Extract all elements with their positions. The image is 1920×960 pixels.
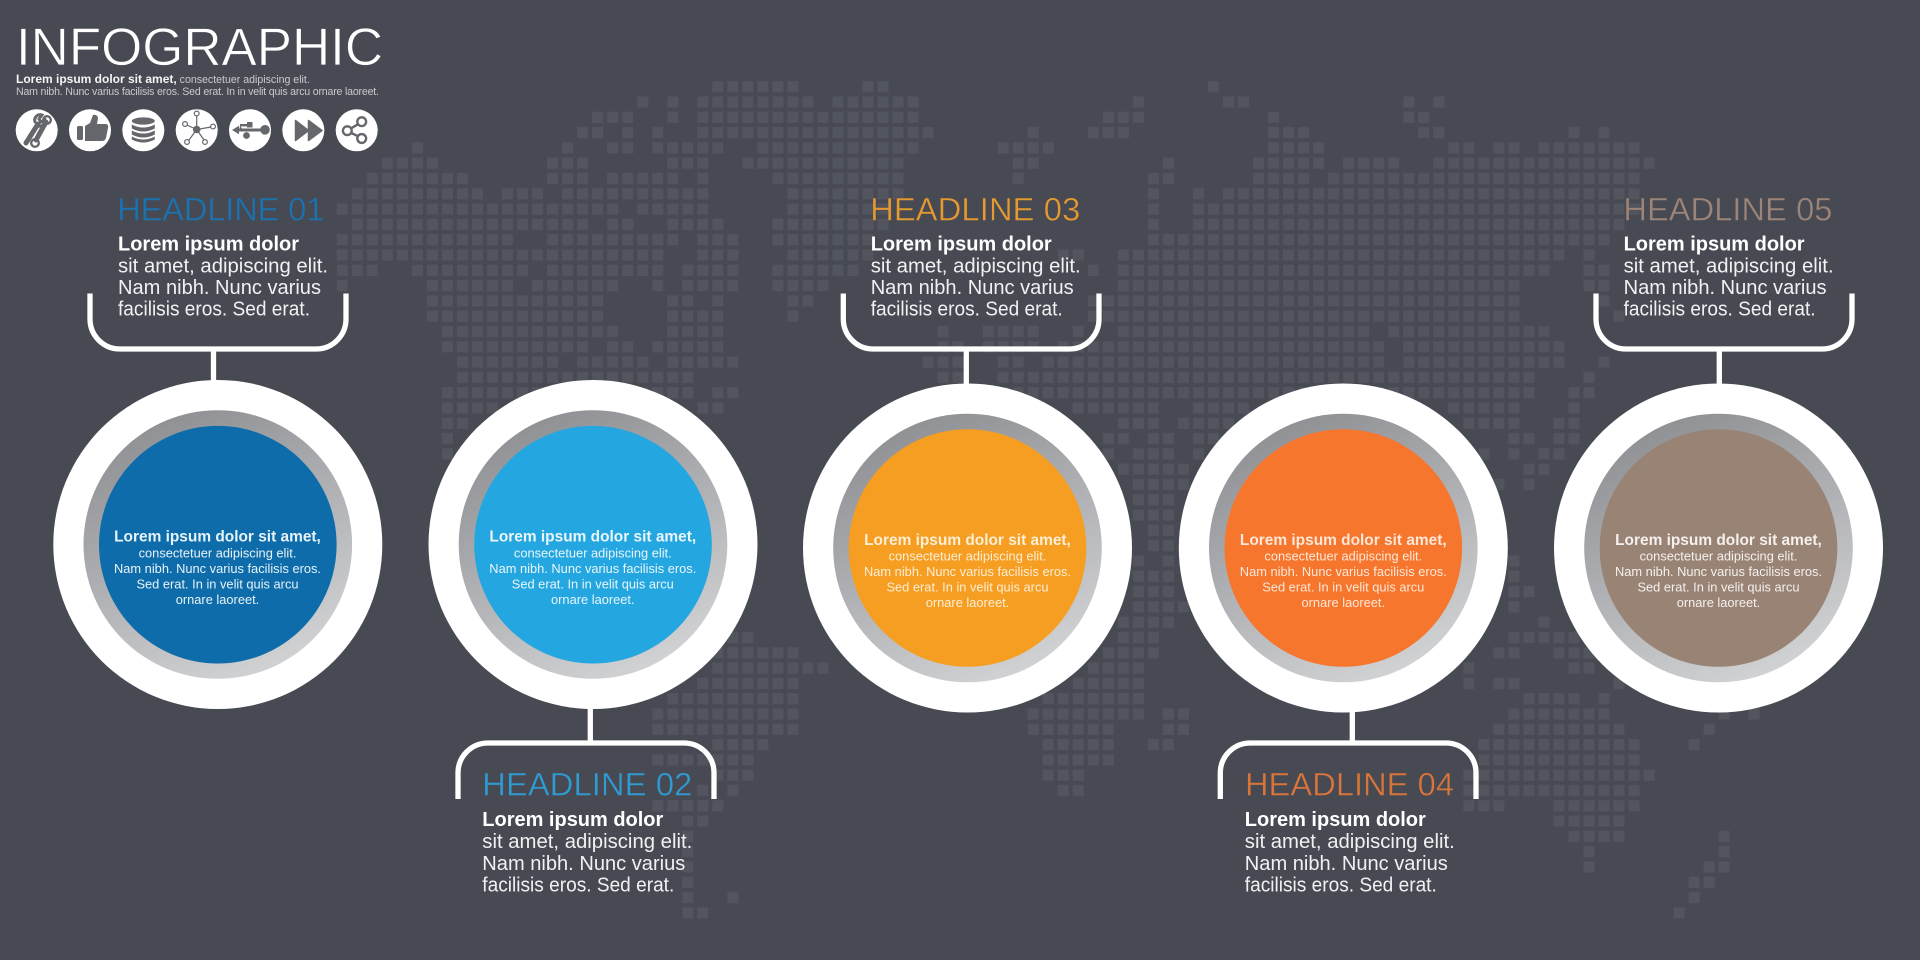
circle 03 text: Sed erat. In in velit quis arcu <box>886 580 1049 595</box>
circle 01 text: Nam nibh. Nunc varius facilisis eros. <box>114 561 321 576</box>
circle 05 text: consectetuer adipiscing elit. <box>1640 549 1797 564</box>
circle 04 text: ornare laoreet. <box>1302 595 1385 610</box>
circle 05 text <box>1615 532 1822 610</box>
connector bracket 05 <box>1596 294 1852 384</box>
circle 02 text: Lorem ipsum dolor sit amet, <box>489 529 696 546</box>
circle 02 text: Sed erat. In in velit quis arcu <box>512 576 674 591</box>
icon: fast forward <box>282 109 324 151</box>
circle 01 text: ornare laoreet. <box>176 592 259 607</box>
panel: circle 04 <box>1179 384 1508 712</box>
circle 03 text: Nam nibh. Nunc varius facilisis eros. <box>864 564 1071 579</box>
text block 01: Lorem ipsum dolor <box>118 234 299 256</box>
circle 04 text <box>1240 532 1447 610</box>
circle 03 text: consectetuer adipiscing elit. <box>889 549 1046 564</box>
circle 03 text: Lorem ipsum dolor sit amet, <box>864 532 1071 549</box>
text block 02: sit amet, adipiscing elit. <box>482 831 692 853</box>
text block 03: facilisis eros. Sed erat. <box>871 299 1063 321</box>
circle 05 text: ornare laoreet. <box>1677 595 1760 610</box>
circle 04 text: Sed erat. In in velit quis arcu <box>1262 580 1424 595</box>
panel: circle 05 <box>1554 384 1883 712</box>
text block 04: facilisis eros. Sed erat. <box>1245 875 1437 897</box>
circle 04 text: Nam nibh. Nunc varius facilisis eros. <box>1240 564 1447 579</box>
heading 02: HEADLINE 02 <box>482 765 692 802</box>
text block 03 <box>871 234 1081 321</box>
text block 01: sit amet, adipiscing elit. <box>118 255 328 277</box>
panel: headline 03 <box>843 190 1099 384</box>
circle 01 text <box>114 529 321 607</box>
panel: headline 05 <box>1596 190 1852 384</box>
text block 04: Lorem ipsum dolor <box>1245 809 1426 831</box>
text block 04 <box>1245 809 1455 897</box>
icon: usb <box>229 109 271 151</box>
connector bracket 02 <box>458 708 714 799</box>
connector bracket 03 <box>843 294 1099 384</box>
icon: network <box>176 109 218 151</box>
connector bracket 04 <box>1220 711 1476 799</box>
heading 05: HEADLINE 05 <box>1623 190 1832 227</box>
text block 05: sit amet, adipiscing elit. <box>1624 255 1834 277</box>
text block 04: sit amet, adipiscing elit. <box>1245 831 1455 853</box>
text block 01 <box>118 234 328 321</box>
icon: share <box>336 109 378 151</box>
text block 03: Lorem ipsum dolor <box>871 234 1052 256</box>
heading 01: HEADLINE 01 <box>117 190 324 227</box>
text block 03: sit amet, adipiscing elit. <box>871 255 1081 277</box>
text block 05 <box>1624 234 1834 321</box>
world map made of dots <box>335 87 1762 913</box>
text block 05: facilisis eros. Sed erat. <box>1624 299 1816 321</box>
icon row <box>16 109 378 151</box>
connector bracket 01 <box>90 294 346 381</box>
text block 04: Nam nibh. Nunc varius <box>1245 853 1448 875</box>
icon: thumbs up <box>69 109 111 151</box>
panel: headline 02 <box>458 708 714 897</box>
circle 01 text: Sed erat. In in velit quis arcu <box>136 576 299 591</box>
circle 05 text: Sed erat. In in velit quis arcu <box>1637 580 1800 595</box>
circle 04 text: Lorem ipsum dolor sit amet, <box>1240 532 1447 549</box>
text block 05: Lorem ipsum dolor <box>1624 234 1805 256</box>
heading 03: HEADLINE 03 <box>870 190 1080 227</box>
title block <box>16 18 383 98</box>
circle 02 text: consectetuer adipiscing elit. <box>514 545 672 560</box>
panel: circle 03 <box>803 384 1132 712</box>
circle 02 text: Nam nibh. Nunc varius facilisis eros. <box>489 561 696 576</box>
panel: circle 02 <box>428 380 758 709</box>
circle 05 text: Nam nibh. Nunc varius facilisis eros. <box>1615 564 1822 579</box>
circle 01 text: Lorem ipsum dolor sit amet, <box>114 529 321 546</box>
circle 01 text: consectetuer adipiscing elit. <box>139 545 296 560</box>
circle 05 text: Lorem ipsum dolor sit amet, <box>1615 532 1822 549</box>
panel: headline 01 <box>90 190 346 381</box>
icon: wrenches <box>16 109 58 151</box>
circle 02 text <box>489 529 696 607</box>
panel: circle 01 <box>53 380 382 709</box>
text block 02: Lorem ipsum dolor <box>482 809 664 831</box>
icon: database <box>122 109 164 151</box>
subtitle line 2: Nam nibh. Nunc varius facilisis eros. Sed erat. In in velit quis arcu ornare laoreet. <box>16 86 379 98</box>
circle 02 text: ornare laoreet. <box>551 592 635 607</box>
text block 05: Nam nibh. Nunc varius <box>1624 277 1827 299</box>
subtitle line 1: Lorem ipsum dolor sit amet, consectetuer adipiscing elit. <box>16 72 310 86</box>
text block 01: Nam nibh. Nunc varius <box>118 277 321 299</box>
text block 02 <box>482 809 692 897</box>
panel: headline 04 <box>1220 711 1476 897</box>
title: INFOGRAPHIC <box>16 18 383 77</box>
text block 01: facilisis eros. Sed erat. <box>118 299 310 321</box>
circle 03 text <box>864 532 1071 610</box>
circle 04 text: consectetuer adipiscing elit. <box>1264 549 1422 564</box>
text block 03: Nam nibh. Nunc varius <box>871 277 1074 299</box>
circle 03 text: ornare laoreet. <box>926 595 1009 610</box>
text block 02: Nam nibh. Nunc varius <box>482 853 685 875</box>
heading 04: HEADLINE 04 <box>1245 765 1454 802</box>
text block 02: facilisis eros. Sed erat. <box>482 875 674 897</box>
